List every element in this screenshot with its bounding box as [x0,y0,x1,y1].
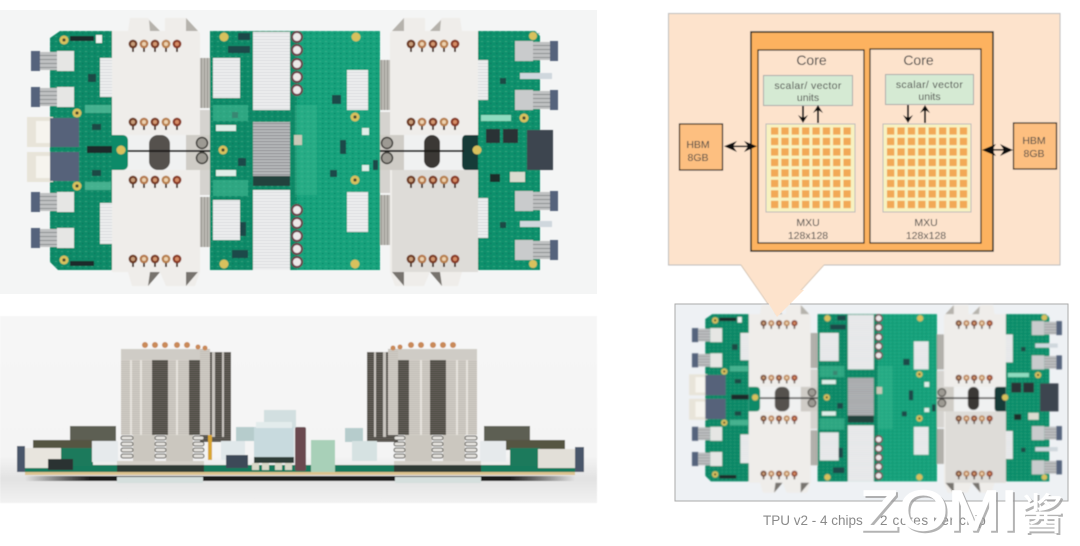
left HBM block: HBM [686,139,710,151]
side view: connector blocks [17,426,584,472]
core 2 MXU label: MXU [914,217,938,229]
core 1 MXU label: 128x128 [788,230,828,242]
right HBM block [1014,123,1056,169]
right HBM block: 8GB [1023,148,1045,160]
caption [763,513,986,528]
core 2 [870,49,981,243]
watermark: ZOMI酱: ZOMI [862,481,1020,545]
watermark: ZOMI酱: ZOMI [860,479,1018,543]
core 1 MXU label: MXU [796,217,820,229]
side view: centre components [208,410,377,472]
core 1 title: Core [796,52,827,68]
watermark: ZOMI酱: 酱 [1023,483,1065,544]
core 1 scalar/vector units: units [797,92,819,104]
side view: PCB [25,465,575,472]
core 2 MXU label [906,217,946,242]
caption: 2 cores per chip [880,513,986,528]
arrow: right HBM to chip [982,144,1013,156]
caption: TPU v2 - 4 chips, [763,513,867,528]
chip package [751,32,993,251]
right HBM block: HBM [1022,135,1046,147]
panel: top-down photo of TPU v2 board [0,10,597,294]
core 2 MXU grid [883,124,971,212]
core 2 scalar/vector units: scalar/ vector [896,79,963,91]
core 1 scalar/vector units [764,76,852,106]
core 1 MXU label [788,217,828,242]
core 2 arrows [903,105,930,123]
core 1 MXU grid [766,124,855,212]
core 2 MXU label: 128x128 [906,230,946,242]
panel: small board photo [675,290,1068,501]
side view: right heatsink tower [367,342,481,483]
arrow: left HBM to core [724,141,757,152]
core 1 arrows [798,105,823,123]
panel: side-view photo of TPU v2 board [0,316,597,503]
panel: callout with chip block diagram [668,14,1060,317]
core 1 scalar/vector units: scalar/ vector [774,80,842,92]
core 1 [758,50,864,243]
core 2 scalar/vector units [886,74,974,104]
core 2 title: Core [903,52,934,68]
left HBM block [680,124,722,170]
core 2 scalar/vector units: units [918,91,941,103]
left HBM block: 8GB [687,152,709,164]
side view: left heatsink tower [117,342,231,483]
watermark: ZOMI酱 [860,479,1065,545]
watermark: ZOMI酱: 酱 [1021,481,1063,542]
